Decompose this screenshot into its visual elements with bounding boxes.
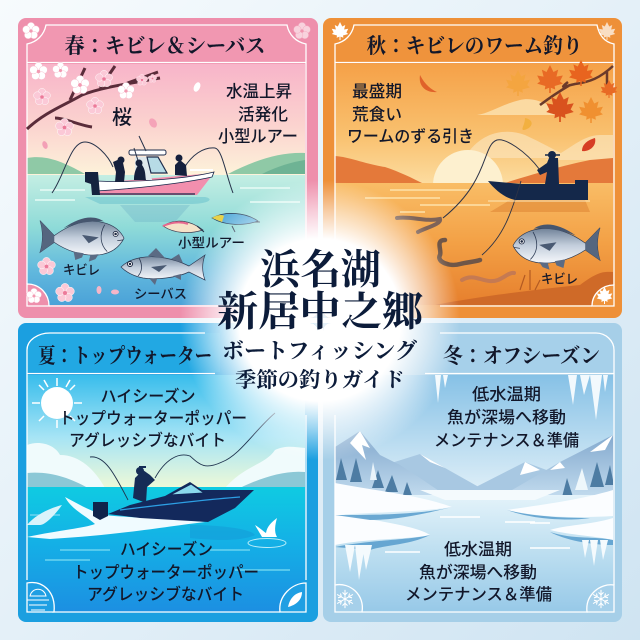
autumn scene [335,64,613,305]
winter scene [335,375,614,612]
title: 新居中之郷 [217,278,423,338]
fish: kibire [40,217,124,262]
fish: kibire autumn [513,225,600,270]
winter frame [335,333,614,612]
fish: sea bass [121,248,205,285]
subtitle: ボートフィッシング [222,334,417,366]
title: 浜名湖 [260,236,381,296]
winter corner icons [335,585,614,612]
autumn header text: 秋：キビレのワーム釣り [366,30,582,60]
icicles [435,375,608,420]
winter header text: 冬：オフシーズン [443,340,600,370]
subtitle [222,334,417,394]
winter notes top [434,385,579,450]
autumn notes: 荒食い [352,105,402,124]
spring frame [23,22,310,306]
summer boat [90,413,275,522]
winter notes bottom [405,540,552,604]
worm lures [397,218,514,281]
summer notes bottom: トップウォーターポッパー [73,563,259,582]
spring notes: 活発化 [238,105,289,124]
summer center glow [182,323,318,458]
spring label: sakura: 桜 [112,106,132,129]
spring labels: シーバス [134,286,187,302]
winter notes top: 魚が深場へ移動 [447,407,566,427]
spring notes [218,82,298,146]
subtitle: 季節の釣りガイド [235,364,405,394]
summer corner icons [27,583,306,612]
winter notes top: メンテナンス＆準備 [434,431,579,450]
spring notes: 小型ルアー [218,127,298,146]
autumn center glow [323,182,458,318]
summer notes top: ハイシーズン [100,386,196,406]
spring boat [52,136,233,195]
winter notes bottom: 魚が深場へ移動 [419,562,537,582]
autumn label: キビレ [541,272,578,286]
spring labels: キビレ [63,262,100,278]
summer notes bottom: アグレッシブなバイト [87,584,244,604]
panel: autumn [323,18,622,318]
wake spray [27,505,62,525]
panel: summer [18,323,318,622]
spring header text: 春：キビレ＆シーバス [64,30,266,60]
spring labels [63,236,245,302]
panel: winter [323,323,622,622]
summer notes bottom [73,539,259,604]
autumn notes [347,82,474,146]
summer scene [27,375,305,612]
winter notes bottom: 低水温期 [444,540,512,559]
autumn boat [443,140,590,255]
summer notes top: アグレッシブなバイト [69,430,226,450]
summer notes top: トップウォーターポッパー [59,409,247,428]
summer header text: 夏：トップウォーター [38,340,212,370]
water splash [248,518,286,548]
summer notes top [59,386,247,450]
spring petals [38,257,119,302]
spring notes: 水温上昇 [226,82,292,101]
lures [163,213,260,233]
summer notes bottom: ハイシーズン [120,539,213,559]
autumn notes: 最盛期 [352,82,402,101]
boat wake [27,497,205,539]
spring labels: 小型ルアー [178,236,245,250]
panel: spring [18,18,318,318]
winter notes bottom: メンテナンス＆準備 [405,585,552,604]
spring center glow [184,184,318,318]
autumn frame [332,22,615,306]
autumn maple branch [420,60,617,151]
winter notes top: 低水温期 [472,385,541,404]
title [217,236,423,338]
sun [32,378,82,428]
summer frame [27,333,306,612]
spring scene [27,64,305,305]
cherry branch [27,62,202,150]
autumn notes: ワームのずる引き [347,127,474,146]
winter center glow [323,323,454,454]
